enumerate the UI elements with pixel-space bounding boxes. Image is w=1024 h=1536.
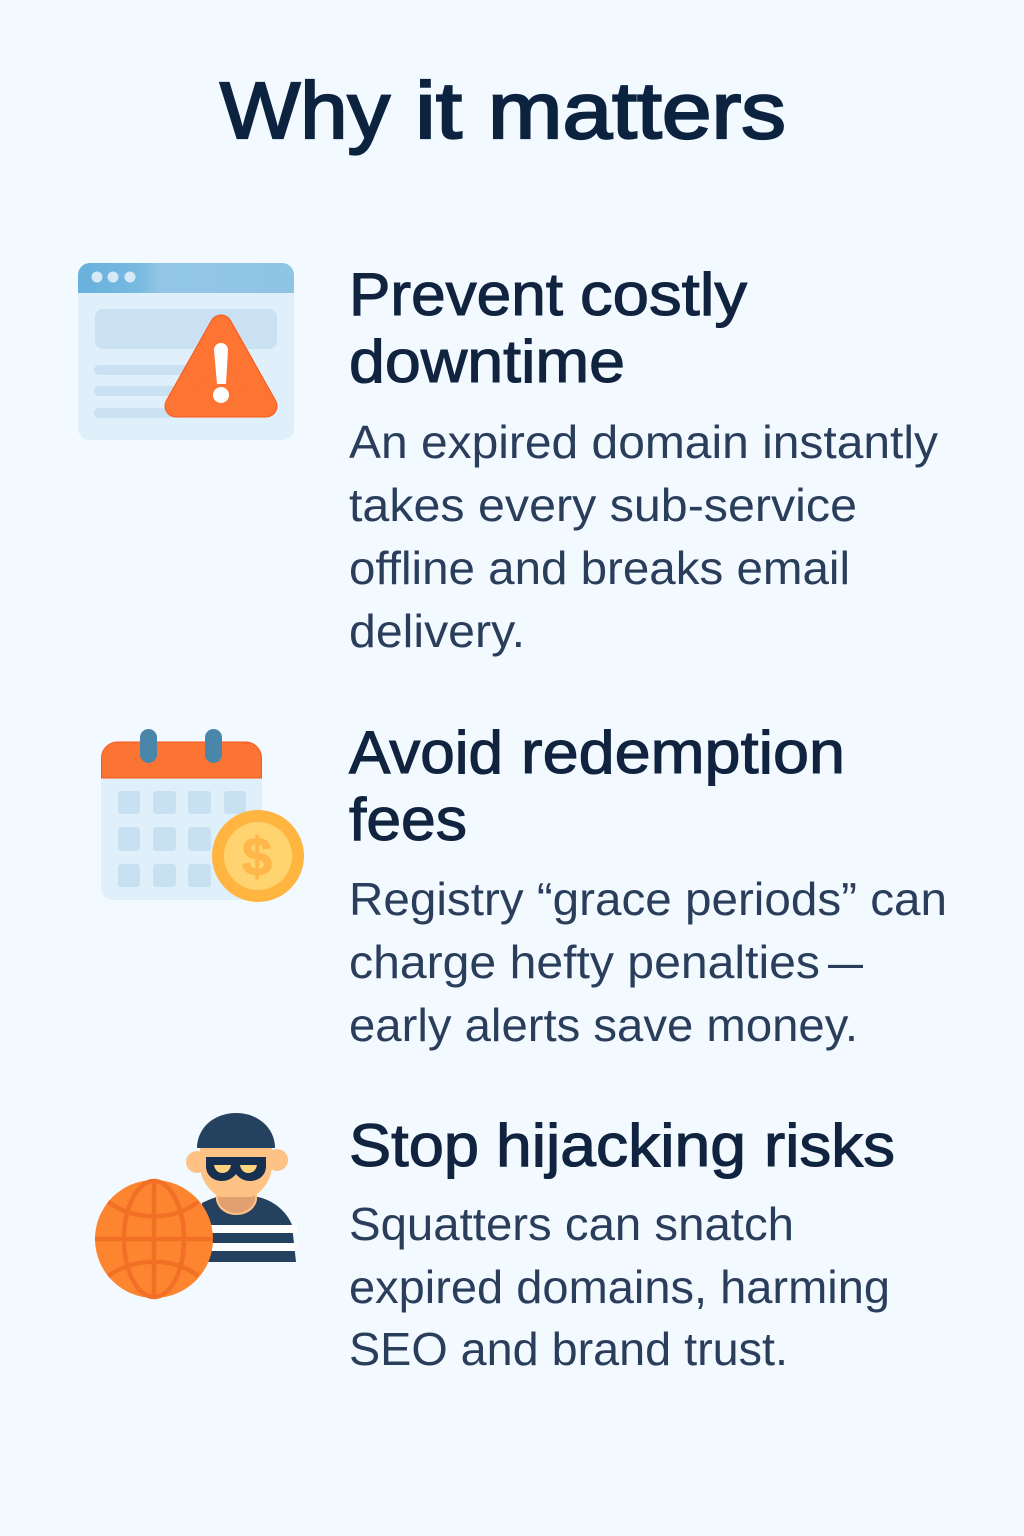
icon: calendar with coin xyxy=(101,729,304,902)
text: fees description xyxy=(349,873,947,1051)
text: fees description: Registry “grace periods” can xyxy=(349,873,947,925)
heading: prevent costly downtime: Prevent xyxy=(349,261,563,328)
text: fees description: — xyxy=(828,936,863,988)
icon: thief with globe xyxy=(95,1113,297,1298)
title: Why xyxy=(220,66,390,155)
text: fees description: early alerts save money. xyxy=(349,999,858,1051)
text: downtime description: delivery. xyxy=(349,605,525,657)
heading: stop hijacking risks xyxy=(349,1112,895,1179)
heading: avoid redemption fees: Avoid xyxy=(349,719,503,786)
title xyxy=(220,66,786,155)
text: hijacking description: Squatters can snatch xyxy=(349,1198,794,1250)
title: it xyxy=(415,66,462,155)
text: downtime description: offline and breaks email xyxy=(349,542,850,594)
text: hijacking description xyxy=(349,1198,890,1375)
heading: avoid redemption fees xyxy=(349,719,845,853)
heading: stop hijacking risks: hijacking xyxy=(496,1112,746,1179)
heading: prevent costly downtime: downtime xyxy=(349,328,625,395)
heading: stop hijacking risks: Stop xyxy=(349,1112,479,1179)
text: downtime description: takes every sub-service xyxy=(349,479,857,531)
text: fees description: charge hefty penalties xyxy=(349,936,820,988)
icon: calendar with coin: $ xyxy=(242,827,272,887)
text: hijacking description: expired domains, harming xyxy=(349,1261,890,1313)
heading: prevent costly downtime: costly xyxy=(580,261,747,328)
heading: avoid redemption fees: redemption xyxy=(521,719,845,786)
icon: browser window with warning xyxy=(78,263,294,440)
heading: avoid redemption fees: fees xyxy=(349,786,467,853)
title: matters xyxy=(488,66,786,155)
text: downtime description: An expired domain instantly xyxy=(349,416,938,468)
heading: stop hijacking risks: risks xyxy=(764,1112,895,1179)
text: hijacking description: SEO and brand trust. xyxy=(349,1323,788,1375)
text: downtime description xyxy=(349,416,938,657)
heading: prevent costly downtime xyxy=(349,261,747,395)
